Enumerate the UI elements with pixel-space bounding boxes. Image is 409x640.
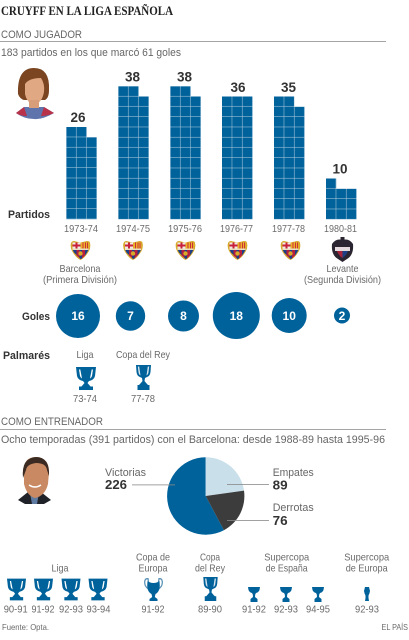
bubble chart: goles: 8 [180,309,187,323]
section heading: como jugador: COMO JUGADOR [1,29,82,41]
callout: empates: 89 [273,478,288,492]
section heading: como entrenador: COMO ENTRENADOR [1,416,103,428]
trophy: Copa de Europa [136,552,170,616]
bar value: 38 (1974-75): 38 [125,70,140,84]
bubble chart: goles: 10 [283,309,296,323]
icon: Barcelona crest row [71,241,300,260]
season labels: 1975-76 [168,223,202,235]
bar chart: partidos [66,70,357,220]
trophies: Supercopa de España: 94-95 [306,604,330,616]
trophy: Copa de Europa: 91-92 [142,604,165,616]
club label: Barcelona: (Primera División) [43,274,117,286]
season labels: 1976-77 [220,223,253,235]
row label: palmarés: Palmarés [3,350,50,362]
source note: Fuente: Opta. [2,622,49,632]
trophies: Liga [4,562,111,616]
callout: empates [227,467,314,492]
season labels: 1977-78 [272,223,305,235]
callout: derrotas [227,502,314,528]
title: CRUYFF EN LA LIGA ESPAÑOLA [1,4,173,18]
season labels [64,223,357,235]
trophies: Supercopa de España: Supercopa [264,552,309,564]
bar value: 38 (1975-76): 38 [177,70,192,84]
bar value: 10: 10 [332,162,348,176]
trophies: Supercopa de España [242,552,330,616]
bar value: 38 (1975-76) [170,70,201,220]
bar value: 10 [326,162,357,220]
trophies: Liga: 93-94 [86,604,111,616]
club label: Barcelona [43,263,117,286]
club label: Barcelona: Barcelona [60,263,101,275]
club label: Levante [304,263,381,286]
trophy: Liga 73-74: Liga [76,349,94,361]
trophy: Copa de Europa: Europa [138,563,168,575]
trophy: Supercopa de Europa: Supercopa [344,552,389,564]
bar value: 36: 36 [230,80,246,95]
callout: derrotas: 76 [273,513,288,528]
callout: victorias [105,467,175,492]
bar value: 35: 35 [281,80,296,95]
icon: older Cruyff portrait [18,457,51,504]
bubble chart: goles: 2 [339,309,346,323]
bar value: 38 (1974-75) [118,70,149,220]
trophy: Copa del Rey: 89-90 [198,604,222,616]
trophies: Supercopa de España: 92-93 [274,604,298,616]
subtitle: coach summary: Ocho temporadas (391 partidos) con el Barcelona: desde 1988-89 hasta 1995-96 [1,434,385,446]
trophies: Supercopa de España: 91-92 [242,604,266,616]
trophies: Liga: 90-91 [4,604,28,616]
trophy: Copa del Rey 77-78: Copa del Rey [116,349,171,361]
row label: goles: Goles [22,311,50,323]
bubble chart: goles [56,292,350,339]
trophy: Copa del Rey 77-78 [116,349,171,405]
season labels: 1980-81 [324,223,357,235]
trophy: Liga 73-74 [73,349,97,405]
slice: empates [206,457,244,496]
bar value: 26: 26 [70,110,86,125]
bar value: 26 [66,110,97,219]
trophy: Copa del Rey 77-78: 77-78 [131,393,155,405]
pie chart: resultados [167,457,244,535]
trophy: Copa de Europa: Copa de [136,552,170,564]
subtitle: player summary: 183 partidos en los que marcó 61 goles [1,47,181,59]
trophy: Liga 73-74: 73-74 [73,393,97,405]
trophies: Liga: Liga [52,562,69,574]
bar value: 36 [222,80,253,220]
slice: victorias [167,457,224,535]
slice: derrotas [206,491,244,530]
bubble chart: goles: 16 [71,309,85,323]
row label: partidos: Partidos [8,209,50,221]
callout: derrotas: Derrotas [273,502,314,514]
trophy: Supercopa de Europa: 92-93 [355,604,379,616]
trophy: Copa del Rey [195,552,226,616]
trophy: Copa del Rey: del Rey [195,563,226,575]
season labels: 1973-74 [64,223,98,235]
trophies: Liga: 91-92 [32,604,55,616]
trophy: Copa del Rey: Copa [200,552,220,564]
callout: empates: Empates [273,467,314,479]
icon: young Cruyff portrait [16,68,54,119]
callout: victorias: 226 [105,477,127,492]
trophies: Supercopa de España: de España [266,563,308,575]
club label: Levante: (Segunda División) [304,274,381,286]
club label: Levante: Levante [326,263,359,275]
trophy: Supercopa de Europa: de Europa [346,563,388,575]
callout: victorias: Victorias [105,467,146,479]
trophy: Supercopa de Europa [344,552,389,616]
trophies: Liga: 92-93 [59,604,83,616]
season labels: 1974-75 [116,223,150,235]
bubble chart: goles: 7 [127,309,134,323]
icon: Levante crest [332,237,353,262]
bubble chart: goles: 18 [230,309,243,323]
bar value: 35 [274,80,305,220]
